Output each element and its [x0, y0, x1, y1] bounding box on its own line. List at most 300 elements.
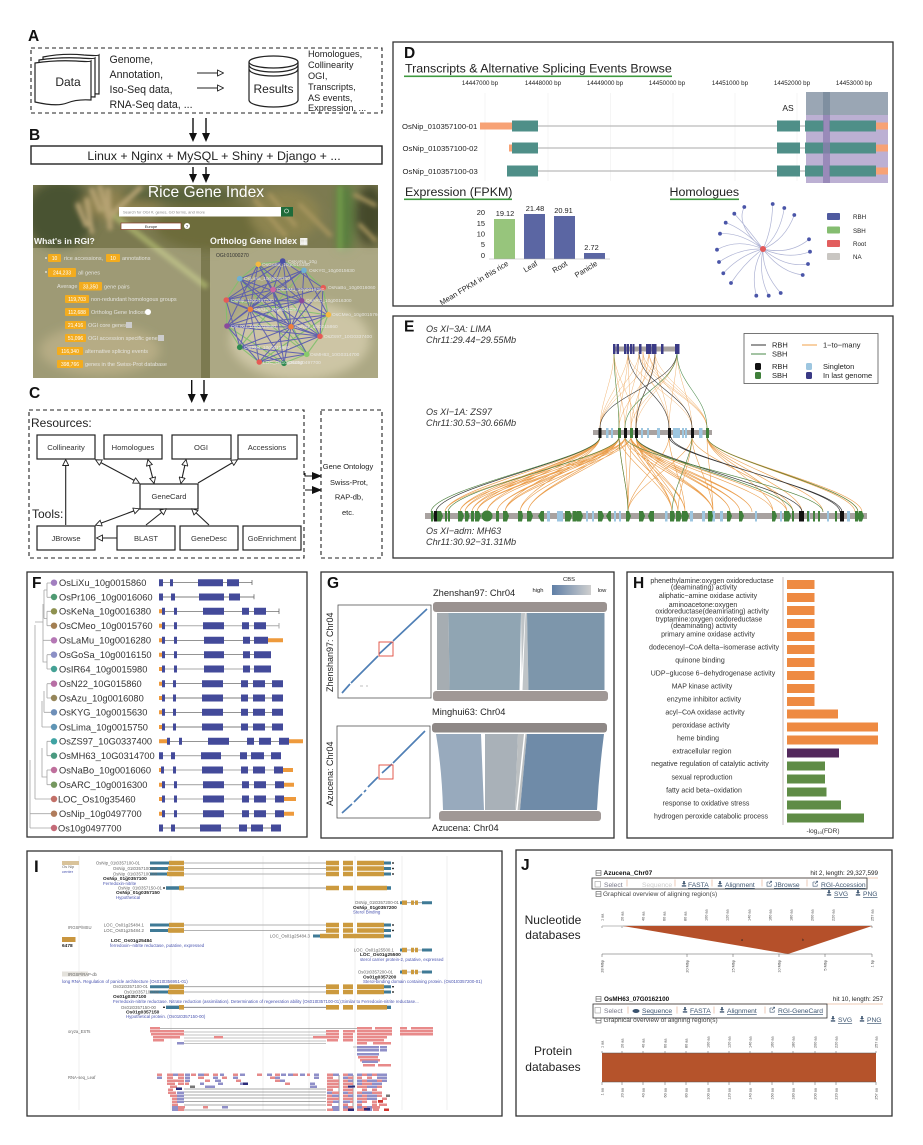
panel: RGI statistics: OGI core genes — [88, 323, 127, 329]
MSU gene models — [104, 922, 444, 962]
overview heading nucleotide: PNG — [863, 891, 878, 898]
accession gene names: OsNaBo_10g0016060 — [59, 765, 151, 775]
network node labels: OsLaMu_10g0016280 — [277, 287, 325, 293]
GO term labels: quinone binding — [675, 658, 725, 665]
box JBrowse — [37, 526, 95, 550]
track labels: oryza_ESTs — [68, 1029, 90, 1034]
frame E — [393, 316, 893, 558]
expression bar chart: 15 — [477, 219, 485, 228]
hit header OsMH63_07G0162100 — [596, 996, 883, 1004]
toolbar protein hit: RGI-GeneCard — [778, 1008, 823, 1015]
panel: RGI statistics: annotations — [122, 256, 151, 262]
synteny legend: 1−to−many — [823, 340, 861, 350]
gene structure introns — [159, 580, 282, 828]
label AS: AS — [782, 103, 794, 113]
MSU gene models: LOC_Os01g25484.1 — [104, 922, 145, 928]
GO term labels: sexual reproduction — [671, 775, 733, 782]
alignment graphic nucleotide: 140 aa — [748, 908, 752, 921]
frame D — [393, 42, 893, 306]
RAP-db gene models: Os01t0357100-02 — [124, 990, 160, 994]
green rule — [404, 198, 512, 200]
genome coordinate axis: 14453000 bp — [836, 80, 873, 87]
overview heading nucleotide — [596, 890, 878, 898]
synteny curves lower: one-to-many — [445, 437, 862, 512]
alignment graphic protein: 60 aa — [664, 1087, 668, 1098]
box BLAST: BLAST — [134, 534, 158, 543]
alignment graphic nucleotide — [600, 908, 874, 973]
network node labels: OsMH63_10G0314700 — [310, 352, 360, 358]
GO term labels: negative regulation of catalytic activity — [651, 761, 769, 768]
overview heading protein: SVG — [838, 1017, 852, 1024]
alignment graphic protein: 160 aa — [770, 1087, 774, 1100]
frame H — [627, 572, 893, 838]
accession gene names: OsKeNa_10g0016380 — [59, 607, 151, 617]
genome labels: Chr11:30.53−30.66Mb — [426, 418, 516, 428]
Nipponbare gene models: OsNip_01t0357150-01 — [118, 886, 163, 890]
heading: Zhenshan97: Zhenshan97: Chr04 — [433, 588, 515, 598]
RAP-db gene models: Os01g0357100 — [113, 994, 147, 1000]
arrows between boxes — [66, 460, 237, 538]
panel: RGI statistics: 21,416 — [68, 323, 83, 329]
alignment graphic protein: 140 aa — [748, 1035, 752, 1048]
lower chromosome ribbons — [432, 723, 607, 821]
Nipponbare gene models: OsNip_01t0357100-01 — [96, 860, 141, 866]
arrows: A to B — [189, 118, 210, 142]
toolbar nucleotide hit — [592, 878, 867, 889]
box Homologues: Homologues — [112, 443, 155, 452]
transcript tracks — [480, 92, 888, 183]
toolbar nucleotide hit: FASTA — [688, 882, 709, 889]
GO term labels — [649, 578, 779, 821]
alignment graphic nucleotide: 28 Mbp — [600, 960, 604, 973]
dashed border external databases — [321, 410, 382, 558]
label I: I — [34, 857, 39, 876]
heading: Ortholog Gene Index: Ortholog Gene Index ▦ — [210, 236, 308, 246]
input data list: Iso-Seq data, — [110, 84, 173, 96]
genome labels: Chr11:29.44−29.55Mb — [426, 335, 516, 345]
label protein databases: Protein — [534, 1044, 572, 1058]
photo background — [25, 180, 385, 380]
expression bar chart: 20 — [477, 208, 485, 217]
orange bars — [787, 580, 878, 744]
box GeneCard — [140, 484, 198, 509]
alignment graphic nucleotide: 160 aa — [768, 908, 772, 921]
results list: Expression, ... — [308, 103, 366, 113]
accession gene names: OsZS97_10G0337400 — [59, 737, 152, 747]
frame J — [516, 850, 892, 1116]
accession gene names: OsLiXu_10g0015860 — [59, 578, 146, 588]
GO term labels: phenethylamine:oxygen oxidoreductase — [650, 578, 774, 585]
GO term labels: fatty acid beta−oxidation — [666, 788, 742, 795]
box GeneDesc — [180, 526, 238, 550]
panel: RGI statistics: non-redundant homologous groups — [91, 297, 177, 303]
GO term labels: extracellular region — [672, 749, 732, 756]
network node labels: OsNaBo_10g0016060 — [328, 285, 376, 291]
panel: RGI statistics: gene pairs — [104, 284, 130, 290]
expression bar chart: Panicle — [573, 259, 599, 280]
panel: RGI statistics — [33, 248, 201, 378]
site title: Rice Gene Index — [148, 184, 264, 201]
arrows: website to C — [188, 380, 208, 403]
toolbar nucleotide hit: Sequence — [642, 882, 672, 889]
expression bar chart: Mean FPKM in this rice — [438, 259, 510, 307]
CBS legend — [533, 577, 607, 595]
stack box — [31, 146, 382, 164]
label D: D — [404, 45, 415, 62]
label F: F — [32, 575, 41, 592]
external database list — [323, 462, 373, 517]
external database list: Gene Ontology — [323, 462, 373, 471]
panel C: resources and tools — [29, 385, 382, 558]
panel: RGI statistics: 244,233 — [53, 270, 71, 276]
alignment graphic protein: 200 aa — [814, 1035, 818, 1048]
expression bar chart — [438, 204, 610, 307]
track labels: RNA-seq_Leaf — [68, 1075, 96, 1080]
GO term labels: (deaminating) activity — [671, 584, 738, 592]
stack text: Linux + Nginx + MySQL + Shiny + Django + ... — [87, 149, 341, 163]
alignment graphic nucleotide: 100 aa — [704, 908, 708, 921]
alignment graphic protein: 220 aa — [834, 1087, 838, 1100]
dashed border resources and tools — [29, 410, 304, 558]
label C: C — [29, 385, 40, 402]
panel: RGI statistics: OGI accession specific genes — [88, 336, 161, 342]
alignment graphic nucleotide: 180 aa — [790, 908, 794, 921]
track labels: Os Nip — [62, 864, 75, 869]
synteny curves upper: RBH and SBH — [600, 352, 707, 428]
network node labels: OsLima_10g0015750 — [244, 276, 290, 282]
heading: transcripts: Transcripts & Alternative Splicing Events Browse — [405, 62, 672, 76]
toolbar nucleotide hit: Alignment — [725, 882, 755, 889]
RAP-db gene models: Os01t0357200-01 — [358, 970, 394, 974]
expression bar chart: Root — [551, 259, 570, 275]
genome coordinate axis: 14451000 bp — [712, 80, 749, 87]
alignment graphic protein: 200 aa — [814, 1087, 818, 1100]
search box: Search for OGI #, genes, GO terms, and more — [123, 210, 206, 214]
GO term labels: oxidoreductase(deaminating) activity — [655, 609, 769, 616]
panel: RGI statistics: alternative splicing events — [85, 349, 148, 355]
network legend: SBH — [853, 228, 866, 235]
network edges green — [226, 261, 328, 363]
toolbar protein hit: Sequence — [642, 1008, 672, 1015]
network edges blue — [226, 261, 328, 363]
dotplot Zhenshan97 vs Minghui63 — [325, 605, 431, 698]
network node labels: OsZS97_10G0337400 — [324, 334, 372, 340]
alignment graphic protein: 1 aa — [600, 1087, 604, 1095]
label protein databases — [525, 1044, 581, 1074]
network node labels: OsIR64_10g0015980 — [244, 345, 290, 351]
RAP-db gene models — [62, 970, 483, 1019]
GO term labels: aliphatic−amine oxidase activity — [659, 593, 758, 600]
track labels: IRGSP/MSU — [68, 925, 92, 930]
panel: RGI statistics: 10 — [52, 256, 57, 262]
Nipponbare gene models: OsNip_01t0357200-01 — [355, 900, 400, 905]
expression bar chart: 0 — [481, 251, 485, 260]
network node labels: OsNip_10g0497700 — [231, 298, 274, 304]
panel: RGI statistics: genes in the Swiss-Prot database — [85, 362, 167, 368]
accession gene names: OsARC_10g0016300 — [59, 780, 147, 790]
synteny legend: RBH — [772, 362, 788, 371]
Nipponbare gene models: Hypothetical — [116, 895, 140, 900]
panel: RGI statistics: 398,766 — [61, 362, 79, 368]
alignment graphic protein: 20 aa — [620, 1087, 624, 1098]
network node labels: Os10g0497700 — [288, 360, 321, 366]
expression bar chart: 5 — [481, 240, 485, 249]
alignment graphic protein: 160 aa — [770, 1035, 774, 1048]
track labels: IRGSP/RAP-db — [68, 972, 98, 977]
hit header Azucena_Chr07: Azucena_Chr07 — [604, 870, 653, 877]
panel: RGI statistics: rice accessions, — [64, 256, 104, 262]
alignment graphic nucleotide: 20 aa — [620, 911, 624, 921]
MSU gene models: LOC_Os01g25484 — [111, 938, 152, 944]
toolbar nucleotide hit: Select — [604, 882, 623, 889]
network node labels — [231, 259, 381, 366]
heading: homologues: Homologues — [670, 185, 739, 199]
Nipponbare gene models: OsNip_01t0357100-02 — [113, 866, 158, 871]
arrows: data to results — [197, 73, 223, 88]
GO term labels: peroxidase activity — [672, 723, 730, 730]
box Collinearity: Collinearity — [47, 443, 85, 452]
axis — [782, 577, 784, 825]
axis title: 10 — [817, 830, 823, 835]
panel E: synteny between three genomes — [393, 316, 893, 558]
label nucleotide databases: Nucleotide — [525, 913, 582, 927]
dotplot Azucena vs Minghui63 — [325, 726, 430, 818]
accession gene names: LOC_Os10g35460 — [58, 794, 136, 804]
panel: RGI statistics: 116,340 — [61, 349, 79, 355]
panel D: transcripts, expression, homologues — [393, 42, 893, 307]
network legend: NA — [853, 254, 862, 261]
Nipponbare gene models: OsNip_01g0357150 — [116, 890, 160, 896]
alignment graphic nucleotide: 80 aa — [684, 911, 688, 921]
synteny legend: RBH — [772, 340, 788, 350]
label A: A — [28, 28, 39, 45]
MSU gene models: LOC_Os01g25484.3 — [270, 934, 311, 938]
panel: RGI statistics: Average — [57, 284, 77, 290]
CBS legend: CBS — [563, 577, 575, 583]
alignment graphic protein: 100 aa — [706, 1035, 710, 1048]
Nipponbare gene models: OsNip_01t0357100-03 — [113, 872, 158, 876]
synteny legend: In last genome — [823, 371, 872, 380]
network legend: RBH — [853, 214, 866, 221]
icon: results database: Results — [253, 82, 294, 96]
box Accessions — [238, 435, 297, 459]
alignment graphic protein: 40 aa — [642, 1087, 646, 1098]
GO term labels: acyl−CoA oxidase activity — [665, 710, 745, 717]
MSU gene models: sterol carrier protein-2, putative, expressed — [360, 957, 444, 962]
expression bar chart: 19.12 — [496, 209, 514, 218]
alignment graphic nucleotide: 1 bp — [870, 960, 874, 967]
alignment graphic protein: 80 aa — [684, 1087, 688, 1098]
expression bar chart: 10 — [477, 230, 485, 238]
label E: E — [404, 318, 414, 336]
genome labels: Chr11:30.92−31.31Mb — [426, 537, 516, 547]
network nodes — [224, 258, 331, 366]
RAP-db gene models: Ferredoxin-nitrite reductase. Nitrate reduction (assimilation). Determination of regeneration ability (Os01t0357100-01);Similar to Ferredoxin-nitrite reductase... — [113, 999, 419, 1004]
expression bar chart: 2.72 — [584, 243, 599, 252]
hit header Azucena_Chr07: hit 2, length: 29,327,599 — [810, 870, 878, 877]
label G: G — [327, 575, 339, 592]
MSU gene models: LOC_Os01g25484.2 — [104, 928, 145, 933]
transcript labels: OsNip_010357100-01 — [402, 122, 477, 131]
genome labels: Os XI−1A: ZS97 — [426, 407, 493, 417]
heading: Tools: Tools: — [32, 507, 63, 521]
phylogenetic tree — [30, 583, 51, 828]
network node labels: OsCMeo_10g0015760 — [332, 312, 381, 318]
RAP-db gene models: Hypothetical protein. (Os01t0357150-00) — [126, 1014, 206, 1019]
box OGI: OGI — [194, 443, 208, 452]
panel: RGI statistics: Ortholog Gene Indices — [91, 310, 146, 316]
label Minghui63: Minghui63: Chr04 — [432, 707, 505, 717]
GO term labels: aminoacetone:oxygen — [669, 602, 737, 609]
frame G — [321, 572, 614, 838]
purple bar — [787, 748, 839, 758]
genome coordinate axis: 14447000 bp — [462, 80, 499, 87]
box JBrowse: JBrowse — [51, 534, 81, 543]
results list: Collinearity — [308, 60, 354, 70]
GO term labels: tryptamine:oxygen oxidoreductase — [656, 616, 762, 624]
accession gene names: Os10g0497700 — [58, 823, 122, 833]
alignment graphic nucleotide: 5 Mbp — [824, 960, 828, 971]
gene structure exons — [159, 579, 289, 832]
accession gene names: OsMH63_10G0314700 — [59, 751, 155, 761]
network node labels: OsLiXu_10g0015860 — [231, 324, 276, 330]
network node labels: OsARC_10g0016300 — [306, 298, 352, 304]
GO term labels: primary amine oxidase activity — [661, 632, 755, 638]
top genome track — [613, 344, 680, 354]
alignment graphic protein: 140 aa — [748, 1087, 752, 1100]
alignment graphic protein: 180 aa — [792, 1087, 796, 1100]
alignment graphic nucleotide: 40 aa — [642, 911, 646, 921]
accession gene names: OsNip_10g0497700 — [59, 809, 142, 819]
panel: RGI statistics: 112,688 — [68, 310, 86, 316]
CBS legend: high — [533, 588, 543, 594]
GO term labels: enzyme inhibitor activity — [667, 697, 742, 704]
alignment graphic nucleotide: 15 Mbp — [732, 960, 736, 973]
accession gene names: OsLima_10g0015750 — [59, 722, 148, 732]
alignment graphic nucleotide: 200 aa — [810, 908, 814, 921]
accession gene names: OsKYG_10g0015630 — [59, 708, 147, 718]
alignment graphic nucleotide: 20 Mbp — [686, 960, 690, 973]
accession selector — [121, 223, 190, 230]
overview heading nucleotide: Graphical overview of aligning region(s) — [603, 891, 717, 898]
accession selector: Europe — [145, 225, 157, 229]
RAP-db gene models: Os01t0357100-01 — [113, 984, 149, 989]
alignment graphic protein: 220 aa — [834, 1035, 838, 1048]
homologue network — [715, 202, 812, 298]
network node labels: OsN22_10G015860 — [295, 324, 338, 330]
alignment graphic protein: 180 aa — [792, 1035, 796, 1048]
expression bar chart: Leaf — [522, 259, 540, 274]
Nipponbare gene models: Ferredoxin-nitrite — [103, 881, 137, 886]
CBS legend: low — [598, 588, 607, 594]
synteny legend: SBH — [772, 371, 787, 380]
GO term labels: dodecenoyl−CoA delta−isomerase activity — [649, 645, 779, 652]
box BLAST — [117, 526, 175, 550]
search box — [119, 207, 293, 216]
RAP-db gene models: Sterol-binding domain containing protein. (Os01t0357200-01) — [363, 979, 483, 984]
overview heading protein: PNG — [867, 1017, 882, 1024]
RAP-db gene models: Os01g0357200 — [363, 974, 397, 980]
external database list: etc. — [342, 508, 354, 517]
accession gene names: OsCMeo_10g0015760 — [59, 621, 153, 631]
heading: expression: Expression (FPKM) — [405, 185, 512, 199]
accession gene names: OsN22_10G015860 — [59, 679, 142, 689]
GO term labels: response to oxidative stress — [663, 801, 750, 808]
synteny legend — [744, 334, 878, 384]
alignment graphic protein: 80 aa — [684, 1038, 688, 1048]
genome labels: Os XI−adm: MH63 — [426, 526, 501, 536]
synteny legend: Singleton — [823, 362, 854, 371]
frame F — [27, 572, 307, 837]
GO term labels: (deaminating) activity — [671, 623, 738, 630]
network node labels: OsKeNa_10g — [288, 259, 317, 265]
Nipponbare gene models — [96, 860, 432, 914]
axis title: (FDR) — [822, 828, 840, 835]
Nipponbare gene models: Sterol Binding — [353, 910, 381, 914]
genome coordinate axis: 14448000 bp — [525, 80, 562, 87]
arrows to external databases — [305, 472, 322, 494]
alignment graphic protein: 120 aa — [728, 1035, 732, 1048]
network legend — [827, 213, 866, 261]
transcript labels: OsNip_010357100-02 — [402, 144, 478, 153]
alignment graphic nucleotide: b — [802, 938, 804, 942]
toolbar protein hit: Select — [604, 1008, 623, 1015]
EST alignments — [150, 1027, 433, 1066]
hit header OsMH63_07G0162100: hit 10, length: 257 — [833, 996, 883, 1003]
AS highlight — [806, 92, 888, 183]
arrows: B to website — [189, 167, 210, 183]
box Collinearity — [37, 435, 95, 459]
track labels: 6478 — [62, 943, 73, 949]
track labels — [62, 861, 98, 1080]
alignment graphic protein: 1 aa — [600, 1040, 604, 1048]
upper chromosome ribbons — [433, 602, 608, 701]
accession gene names: OsLaMu_10g0016280 — [59, 636, 151, 646]
results list: OGI, — [308, 71, 327, 81]
network node labels: OsAzu_10g0016080 — [254, 307, 298, 313]
panel: ortholog network — [210, 248, 381, 378]
transcript labels — [402, 122, 478, 176]
toolbar protein hit: FASTA — [690, 1008, 711, 1015]
MSU gene models: LOC_Os01g25500 — [360, 952, 401, 958]
accession selector: ? — [186, 224, 189, 229]
input data list — [110, 54, 193, 111]
label H: H — [633, 575, 644, 592]
icon: results database — [249, 56, 298, 107]
label J: J — [521, 857, 530, 874]
panel F: gene structures across accessions — [27, 572, 307, 837]
accession gene names: OsIR64_10g0015980 — [59, 664, 147, 674]
label nucleotide databases — [525, 913, 582, 942]
overview heading protein: Graphical overview of aligning region(s) — [604, 1017, 718, 1024]
axis title: -log — [806, 828, 817, 835]
box GeneDesc: GeneDesc — [191, 534, 227, 543]
box GoEnrichment: GoEnrichment — [248, 534, 297, 543]
panel H: GO enrichment bar chart — [627, 572, 893, 838]
network node labels: OsKYG_10g0015630 — [309, 268, 355, 274]
alignment graphic protein: 257 aa — [874, 1035, 878, 1048]
external database list: RAP-db, — [335, 492, 363, 502]
box OGI — [172, 435, 231, 459]
alignment graphic nucleotide: a — [741, 938, 743, 942]
box Accessions: Accessions — [248, 443, 286, 452]
toolbar nucleotide hit: RGI-Accession — [821, 882, 866, 889]
alignment graphic protein: 20 aa — [620, 1038, 624, 1048]
alignment graphic protein: 40 aa — [642, 1038, 646, 1048]
green rule — [404, 76, 672, 77]
genome labels — [426, 324, 516, 547]
panel B: technology stack — [29, 127, 382, 164]
